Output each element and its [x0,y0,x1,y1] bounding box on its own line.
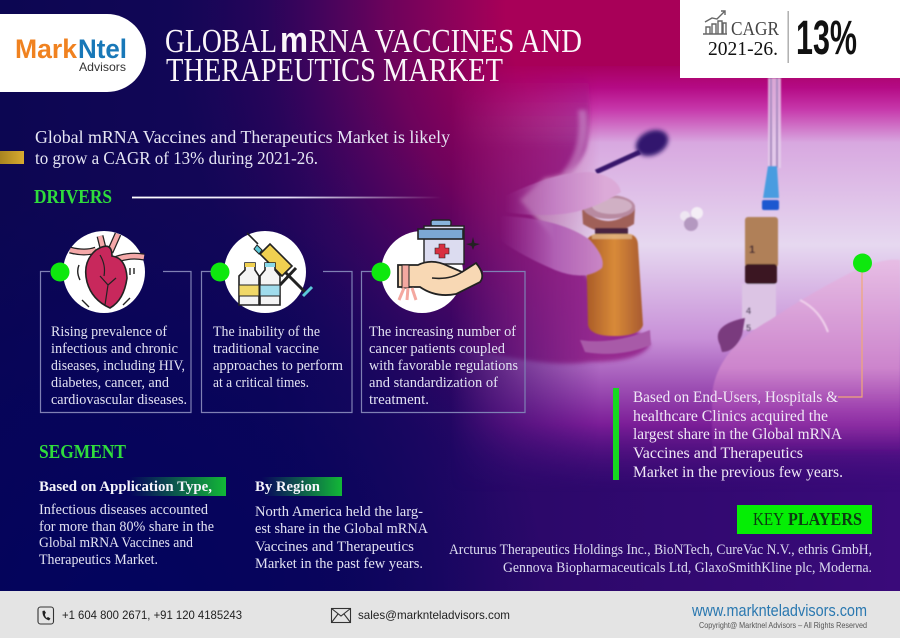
text: driver 3 [369,324,518,408]
syringe: 4 [746,306,751,316]
swab [596,152,640,172]
segment: application type: for more than 80% share in the [39,519,214,535]
key players badge: KEY [753,509,784,529]
intro text: to grow a CAGR of 13% during 2021-26. [35,148,318,168]
CAGR badge: 13% [796,12,857,65]
callout: end-users [613,254,872,481]
text: driver 1 [51,324,187,408]
photo: gloved hands with vial and syringe [440,66,900,492]
segment: region: est share in the Global mRNA [255,521,428,537]
callout: end-users: Vaccines and Therapeutics [633,445,803,462]
gold accent bar [0,151,24,164]
text: driver 1: diseases, including HIV, [51,358,185,374]
title: RNA VACCINES AND [309,23,582,60]
segment: region: Market in the past few years. [255,556,423,572]
lower glove hand [712,260,900,455]
intro text [35,127,450,168]
callout: end-users: Market in the previous few years. [633,464,843,481]
logo [0,14,146,92]
segment: region: By Region [255,479,321,495]
logo: Mark [15,34,78,64]
callout: end-users: Based on End-Users, Hospitals & [633,389,839,406]
footer: sales@marknteladvisors.com [358,608,510,622]
footer: Copyright@ Marktnel Advisors – All Rights Reserved [699,621,867,630]
text: driver 2: The inability of the [213,324,320,340]
segment: application type: Therapeutics Market. [39,552,158,568]
title: THERAPEUTICS MARKET [166,52,503,89]
syringe: 1 [749,244,755,256]
text: driver 1: infectious and chronic [51,341,178,357]
text: driver 1: diabetes, cancer, and [51,375,169,391]
segment: application type: Infectious diseases accounted [39,502,208,518]
segment: region [255,477,428,572]
text: driver 1: Rising prevalence of [51,324,167,340]
drivers heading: DRIVERS [34,186,112,208]
key players badge [737,505,872,534]
panel: driver 2 [202,231,352,412]
middle finger [500,216,603,276]
segment: region: Vaccines and Therapeutics [255,539,414,555]
text: driver 3: treatment. [369,392,429,408]
key players list: Gennova Biopharmaceuticals Ltd, GlaxoSmithKline plc, Moderna. [503,560,872,576]
title [165,19,582,89]
text: driver 3: The increasing number of [369,324,516,340]
title: m [280,19,308,60]
footer [0,591,900,638]
icon: phone [38,607,54,624]
footer: www.marknteladvisors.com [691,601,867,620]
segment: region: North America held the larg- [255,504,423,520]
segment: application type: Global mRNA Vaccines and [39,535,193,551]
panel: driver 3 [362,220,525,412]
vial [580,195,651,354]
intro text: Global mRNA Vaccines and Therapeutics Market is likely [35,127,450,147]
icon: growth chart [703,11,727,34]
text: driver 1: cardiovascular diseases. [51,392,187,408]
footer: +1 604 800 2671, +91 120 4185243 [62,608,242,622]
callout: end-users: healthcare Clinics acquired the [633,408,828,425]
text: driver 2: at a critical times. [213,375,309,391]
CAGR badge [680,0,900,78]
syringe: 5 [746,323,751,333]
segment heading: SEGMENT [39,441,127,463]
icon: envelope [332,608,350,622]
key players badge: PLAYERS [788,509,862,529]
panel: driver 1 [40,231,191,412]
text: driver 2: approaches to perform [213,358,343,374]
syringe [742,78,781,333]
CAGR badge: 2021-26. [708,38,778,60]
text: driver 3: cancer patients coupled [369,341,505,357]
text: driver 3: with favorable regulations [369,358,518,374]
logo: Advisors [79,60,126,74]
icon: heart [63,231,145,313]
CAGR badge: CAGR [731,18,780,40]
title: GLOBAL [165,23,277,60]
segment: application type [39,477,226,568]
logo: Ntel [78,34,127,64]
upper finger [505,172,621,215]
pills [680,207,703,231]
text: driver 2: traditional vaccine [213,341,319,357]
icon: hand holding first-aid kit [381,220,482,313]
upper glove sleeve [456,88,652,366]
icon: vials and syringe [224,231,312,313]
key players list [449,542,872,576]
segment: application type: Based on Application Type, [39,479,212,495]
cuff highlight [562,110,587,176]
text: driver 3: and standardization of [369,375,498,391]
text: driver 2 [213,324,343,391]
callout: end-users: largest share in the Global mRNA [633,426,842,443]
